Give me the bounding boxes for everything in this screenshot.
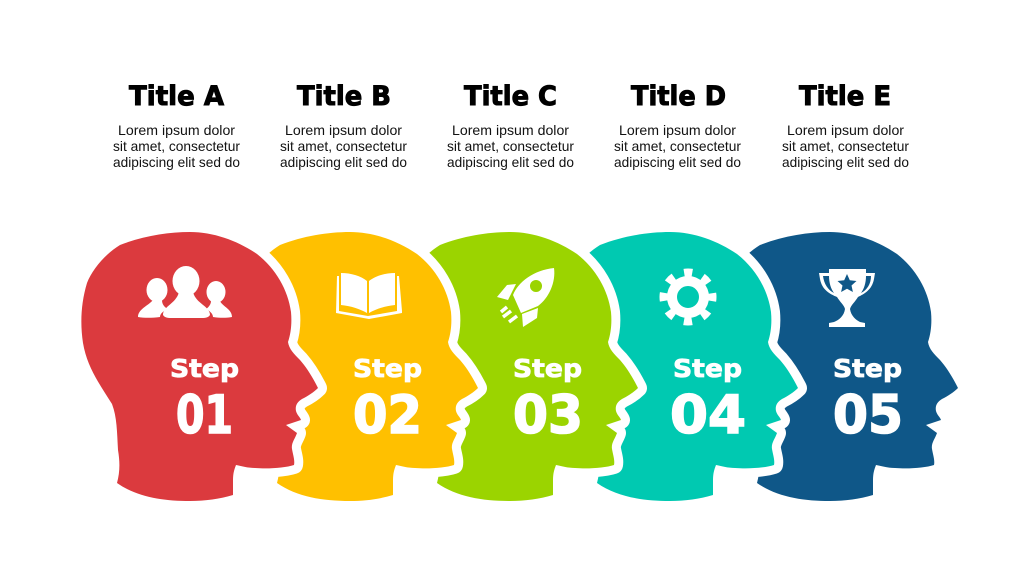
step label 02: Step bbox=[353, 354, 422, 383]
icon: rocket bbox=[497, 268, 554, 327]
text block D: adipiscing elit sed do bbox=[614, 154, 741, 170]
title B: Title B bbox=[297, 81, 391, 112]
head 04: teal bbox=[561, 232, 798, 501]
step label 02: 02 bbox=[353, 385, 422, 446]
text block A: Lorem ipsum dolor bbox=[118, 122, 235, 138]
text block A bbox=[113, 122, 240, 170]
text block D: sit amet, consectetur bbox=[614, 138, 741, 154]
text block B: Lorem ipsum dolor bbox=[285, 122, 402, 138]
icon: trophy bbox=[819, 269, 875, 327]
step label 01: Step bbox=[170, 354, 239, 383]
text block C: Lorem ipsum dolor bbox=[452, 122, 569, 138]
icon: open book bbox=[336, 273, 402, 319]
text block B: adipiscing elit sed do bbox=[280, 154, 407, 170]
text block C: adipiscing elit sed do bbox=[447, 154, 574, 170]
step label 05 bbox=[833, 354, 903, 446]
heading group: Title C bbox=[447, 81, 574, 170]
step label 01 bbox=[170, 354, 239, 446]
text block D bbox=[614, 122, 741, 170]
heading group: Title D bbox=[614, 81, 741, 170]
step label 03: 03 bbox=[513, 385, 583, 446]
head 02: yellow bbox=[241, 232, 478, 501]
head 05: blue bbox=[721, 232, 958, 501]
heading group: Title A bbox=[113, 81, 240, 170]
text block D: Lorem ipsum dolor bbox=[619, 122, 736, 138]
text block C: sit amet, consectetur bbox=[447, 138, 574, 154]
text block B bbox=[280, 122, 407, 170]
title D: Title D bbox=[631, 81, 726, 112]
step label 03: Step bbox=[513, 354, 582, 383]
step label 01: 01 bbox=[176, 385, 233, 446]
step label 04 bbox=[670, 354, 746, 446]
step label 05: Step bbox=[833, 354, 902, 383]
heading group: Title E bbox=[782, 81, 909, 170]
text block E bbox=[782, 122, 909, 170]
heading group: Title B bbox=[280, 81, 407, 170]
step label 02 bbox=[353, 354, 422, 446]
step label 04: 04 bbox=[670, 385, 746, 446]
text block E: adipiscing elit sed do bbox=[782, 154, 909, 170]
text block A: adipiscing elit sed do bbox=[113, 154, 240, 170]
text block B: sit amet, consectetur bbox=[280, 138, 407, 154]
text block C bbox=[447, 122, 574, 170]
text block E: sit amet, consectetur bbox=[782, 138, 909, 154]
head 01: red bbox=[81, 232, 318, 501]
icon: people bbox=[138, 266, 232, 318]
step label 03 bbox=[513, 354, 583, 446]
step label 05: 05 bbox=[833, 385, 903, 446]
icon: gear bbox=[664, 273, 712, 321]
step label 04: Step bbox=[673, 354, 742, 383]
text block A: sit amet, consectetur bbox=[113, 138, 240, 154]
title E: Title E bbox=[799, 81, 891, 112]
title C: Title C bbox=[464, 81, 557, 112]
title A: Title A bbox=[129, 81, 224, 112]
head 03: green bbox=[401, 232, 638, 501]
text block E: Lorem ipsum dolor bbox=[787, 122, 904, 138]
